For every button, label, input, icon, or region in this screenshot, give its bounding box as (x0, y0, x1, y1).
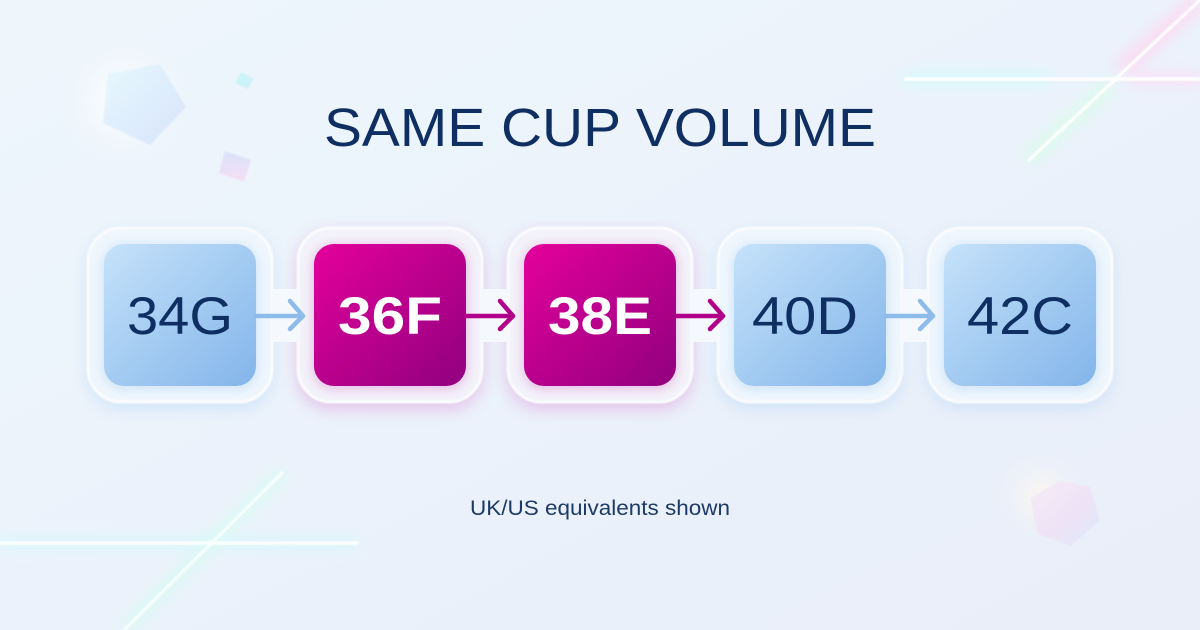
step: 34G: 34G (127, 287, 233, 346)
decoration: top-right light streaks (904, 0, 1200, 161)
connector bands (270, 289, 930, 342)
decoration: bottom-left light streaks (0, 472, 358, 630)
decoration: small pink square (219, 151, 251, 182)
arrow: 40D to 42C (886, 301, 933, 329)
step: 36F highlighted: 36F (338, 287, 442, 346)
step: 34G (87, 228, 273, 409)
step: 38E highlighted (507, 228, 693, 409)
footnote: UK/US equivalents shown (470, 497, 730, 520)
arrow: 34G to 36F (256, 301, 303, 329)
decoration: small teal square (235, 72, 254, 89)
step: 42C (927, 228, 1113, 409)
arrow: 38E to 40D (676, 301, 723, 329)
step: 38E highlighted: 38E (548, 287, 652, 346)
decoration: hexagon (1020, 475, 1100, 546)
title: SAME CUP VOLUME (324, 98, 876, 158)
step: 36F highlighted (297, 228, 483, 409)
step: 40D: 40D (752, 287, 858, 346)
step: 42C: 42C (967, 287, 1073, 346)
step: 40D (717, 228, 903, 409)
arrow: 36F to 38E (466, 301, 513, 329)
decoration: pentagon (89, 64, 186, 145)
